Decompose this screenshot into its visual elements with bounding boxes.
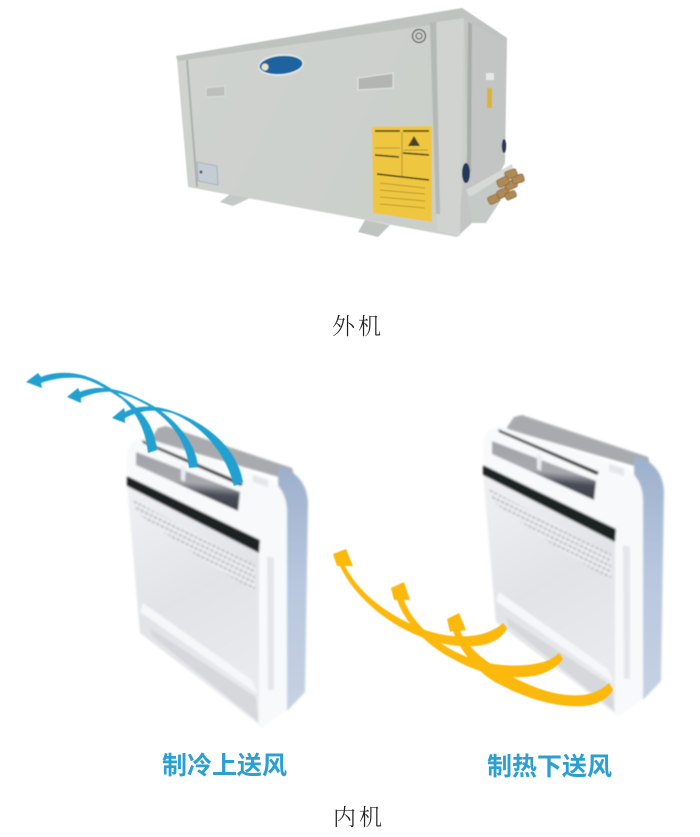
- arrow 3: [112, 407, 243, 486]
- unit front face: [176, 8, 467, 237]
- arrow 2: [391, 582, 563, 677]
- handle right: [358, 73, 393, 90]
- mounting feet: [220, 194, 390, 237]
- arrow 3: [447, 613, 613, 706]
- caption: indoor unit: 内机: [333, 805, 385, 830]
- handle left: [206, 86, 225, 97]
- side handle and warning: [486, 73, 494, 108]
- top rim: [176, 8, 507, 61]
- spec sticker: [197, 162, 218, 185]
- CCC mark: [412, 30, 426, 42]
- caption: outdoor unit: 外机: [332, 314, 384, 339]
- indoor unit: cooling: [127, 426, 308, 728]
- arrow 1: [26, 373, 157, 453]
- outdoor unit: [176, 8, 525, 237]
- arrows: cooling up-draft: [26, 373, 243, 486]
- arrow 1: [333, 549, 507, 646]
- corner post: [437, 18, 464, 236]
- pipe box: [466, 164, 514, 223]
- arrow 2: [67, 388, 198, 468]
- yellow warning label: [372, 126, 432, 222]
- unit side face: [457, 8, 507, 237]
- label: cooling up-draft: 制冷上送风: [162, 752, 287, 780]
- panel groove: [430, 22, 440, 214]
- copper fittings: [487, 168, 525, 205]
- arrows: heating down-draft: [333, 549, 613, 706]
- blue plugs: [462, 139, 506, 183]
- indoor unit: heating: [483, 415, 664, 717]
- logo badge: [257, 52, 305, 78]
- label: heating down-draft: 制热下送风: [487, 753, 612, 781]
